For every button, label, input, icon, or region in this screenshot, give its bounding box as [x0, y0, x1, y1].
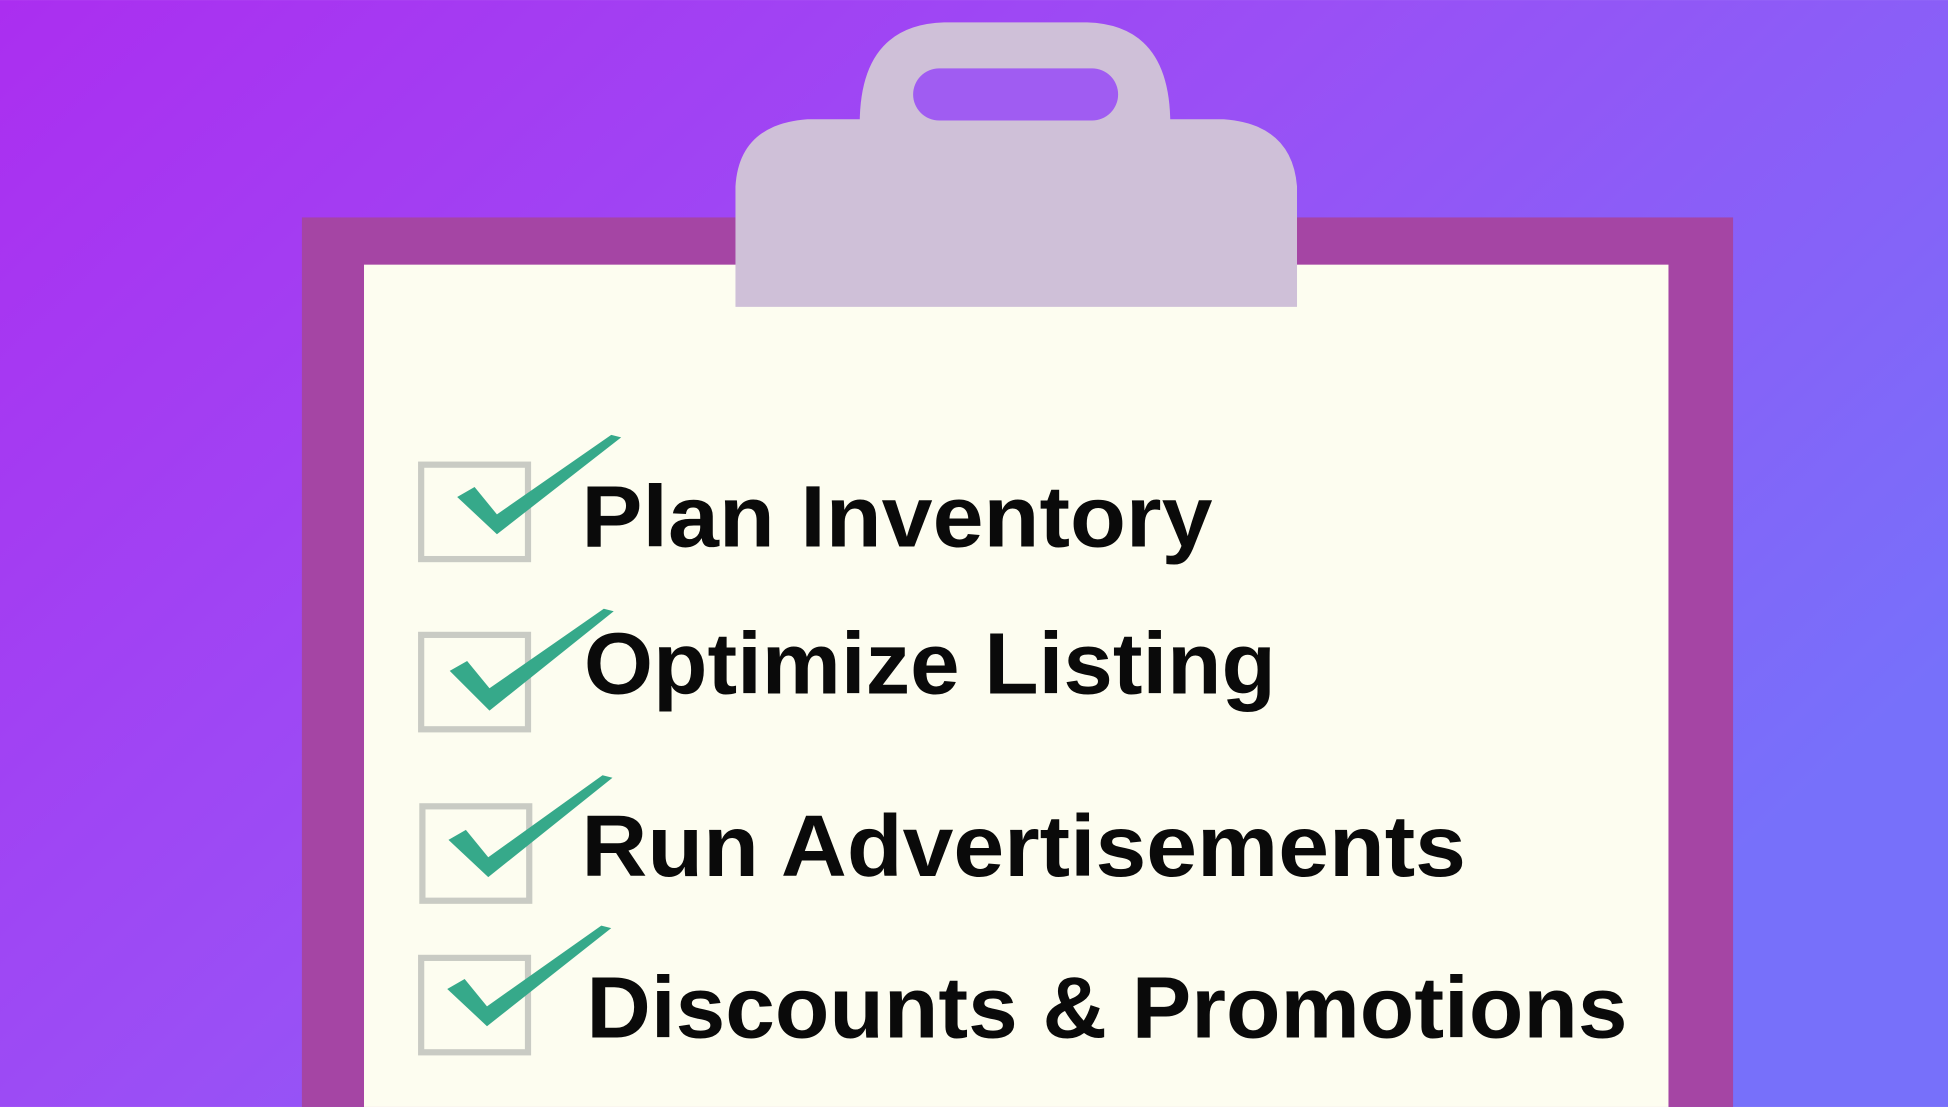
- item: Run Advertisements: [422, 775, 1466, 901]
- item: Plan Inventory: Plan Inventory: [581, 469, 1213, 566]
- paper: [364, 265, 1668, 1107]
- checklist: [421, 435, 1627, 1056]
- item: Optimize Listing: [421, 609, 1276, 729]
- clipboard board: [302, 217, 1733, 1107]
- item: Discounts & Promotions: Discounts & Promotions: [586, 959, 1627, 1056]
- item: Run Advertisements: Run Advertisements: [581, 798, 1466, 895]
- item: Optimize Listing: Optimize Listing: [584, 615, 1276, 712]
- item: Discounts & Promotions: [421, 926, 1627, 1056]
- item: Plan Inventory: [421, 435, 1213, 566]
- clip: [735, 22, 1297, 307]
- clip hole: [913, 68, 1118, 121]
